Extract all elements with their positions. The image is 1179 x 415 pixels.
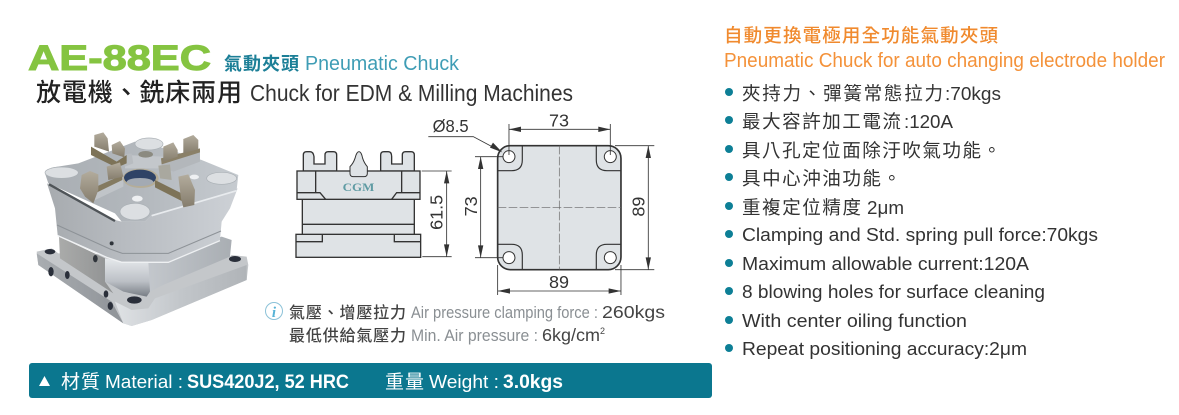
feature list: 最大容許加工電流 [742, 108, 901, 134]
icon: info [266, 302, 282, 321]
top face [45, 142, 238, 222]
feature list: :120A [904, 111, 954, 132]
feature list: 2μm [867, 197, 904, 218]
feature list: Maximum allowable current:120A [742, 253, 1030, 274]
note: air pressure clamping force: 氣壓、增壓拉力 [289, 299, 406, 323]
dimension: bottom width 89: 89 [549, 272, 569, 292]
weight: 重量 [385, 367, 424, 394]
feature list: 具中心沖油功能。 [742, 165, 901, 191]
note: air pressure clamping force: 260kgs [602, 302, 665, 322]
weight: Weight : [429, 371, 499, 392]
feature heading [724, 22, 1165, 72]
heading: chuck for EDM and milling machines [36, 73, 573, 109]
clamping jaw: front left [80, 162, 123, 203]
subtitle: pneumatic chuck: Pneumatic Chuck [305, 53, 460, 75]
note: minimum air pressure: 2 [600, 326, 605, 336]
subtitle: pneumatic chuck [224, 50, 460, 76]
heading: chuck for EDM and milling machines: Chuck for EDM & Milling Machines [250, 80, 573, 106]
feature list: 8 blowing holes for surface cleaning [742, 281, 1045, 302]
dimension: right height 89: 89 [629, 197, 649, 217]
note: minimum air pressure: 6kg/cm [542, 325, 600, 345]
feature heading: Pneumatic Chuck for auto changing electrode holder [724, 50, 1165, 72]
feature list [725, 80, 1098, 359]
material: SUS420J2, 52 HRC [187, 372, 349, 393]
center bore [123, 151, 199, 202]
body block [59, 237, 232, 297]
dimension: right height 89 [615, 146, 654, 270]
title: model number: AE-88EC [28, 39, 211, 78]
dimension: left height 73 [461, 157, 503, 258]
base plate [37, 248, 248, 326]
dimension: hole diameter 8.5: Ø8.5 [433, 116, 469, 136]
material [61, 367, 349, 394]
product photo: pneumatic chuck [37, 132, 248, 326]
subtitle: pneumatic chuck: 氣動夾頭 [224, 50, 299, 76]
technical drawing: top view [498, 146, 621, 270]
brand mark: CGM [343, 180, 374, 194]
feature list: :70kgs [945, 83, 1001, 104]
material: Material : [105, 371, 183, 392]
dimension: top width 73 [509, 111, 610, 155]
weight [385, 367, 563, 394]
feature heading: 自動更換電極用全功能氣動夾頭 [724, 22, 998, 48]
dimension: left height 73: 73 [461, 196, 481, 216]
feature list: 具八孔定位面除汙吹氣功能。 [742, 137, 1001, 163]
note: air pressure clamping force [289, 299, 665, 323]
feature list: Repeat positioning accuracy:2μm [742, 338, 1027, 359]
note: air pressure clamping force: Air pressure clamping force : [411, 303, 598, 322]
feature list: 夾持力、彈簧常態拉力 [742, 80, 943, 106]
round pads [45, 138, 237, 220]
clamping jaw: back left [91, 132, 133, 168]
clamping jaw: front right [155, 164, 195, 207]
clamping jaw: back right [161, 135, 200, 172]
note: minimum air pressure [289, 322, 605, 346]
dimension: bottom width 89 [498, 265, 621, 295]
feature list: Clamping and Std. spring pull force:70kgs [742, 224, 1098, 245]
upper plate side [47, 183, 238, 262]
material: 材質 [61, 367, 100, 394]
feature list: 重複定位精度 [742, 194, 861, 220]
icon: info: i [272, 305, 277, 321]
dimension: height 61.5: 61.5 [426, 195, 446, 230]
material and weight bar [29, 363, 712, 398]
note: minimum air pressure: Min. Air pressure : [411, 326, 538, 345]
heading: chuck for EDM and milling machines: 放電機、銑床兩用 [36, 73, 242, 109]
icon: triangle [39, 376, 50, 386]
feature list: With center oiling function [742, 310, 967, 331]
dimension: height 61.5 [422, 171, 452, 257]
note: minimum air pressure: 最低供給氣壓力 [289, 322, 406, 346]
dimension: hole diameter 8.5 [428, 116, 502, 152]
dimension: top width 73: 73 [549, 111, 569, 131]
technical drawing: front view [296, 152, 421, 257]
weight: 3.0kgs [503, 372, 563, 393]
